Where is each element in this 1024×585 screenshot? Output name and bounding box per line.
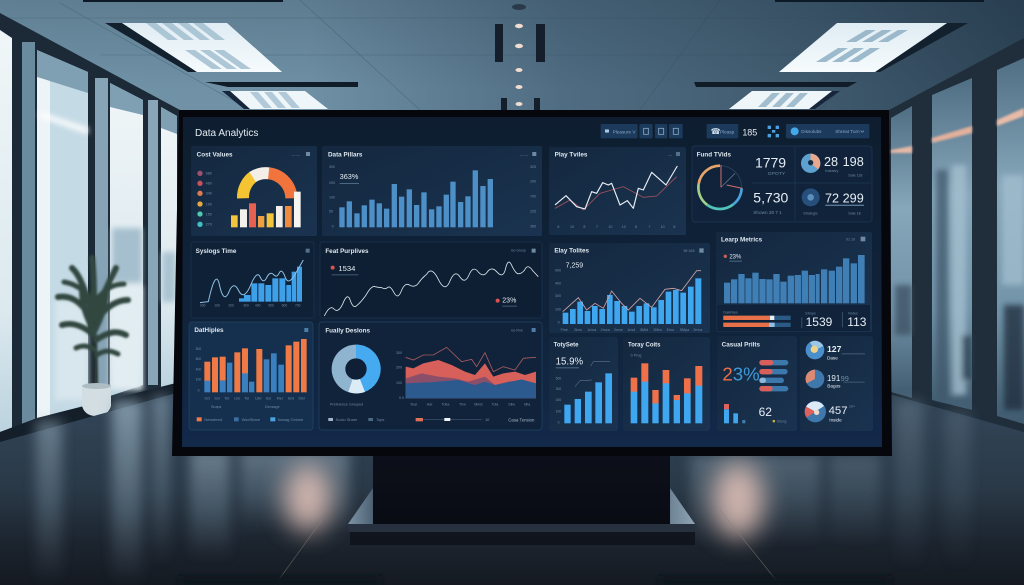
header toolbar: Shreat Turn — [835, 129, 860, 134]
panel: long analytics: Notes — [848, 312, 858, 316]
panel: play values line chart: Play Tviles — [555, 152, 588, 159]
panel: dat tables stacked bars: Stor — [298, 396, 306, 400]
panel: dat tables stacked bars: Densage — [265, 405, 280, 409]
monitor screen — [182, 117, 882, 447]
panel: data pillars bar chart: 200 — [329, 181, 335, 185]
panel: totals bar chart: 15.9% — [556, 356, 583, 367]
centre spotlights and vents — [495, 4, 545, 110]
panel: front values stats: Sale 18 — [848, 211, 861, 215]
panel: long analytics: Learp Metrics — [721, 236, 763, 243]
bars — [231, 192, 301, 227]
panel: fully designs donut and area chart: Tola — [492, 402, 499, 406]
panel: play values line chart: 8 — [583, 225, 585, 229]
small pie: 28 198 — [801, 154, 820, 173]
small dial: 72 299 — [802, 188, 820, 206]
panel: casual profiles — [717, 336, 797, 431]
legend dots: 980 — [206, 172, 212, 176]
panel: fully designs donut and area chart: Toka — [442, 402, 450, 406]
panel: today costs stacked bars: Toray Coits — [628, 343, 661, 349]
panel: data pillars bar chart: 700 — [530, 194, 536, 198]
panel: dat tables stacked bars: 500 — [196, 347, 201, 351]
white trend line — [555, 166, 677, 209]
panel: daily tables bar and line chart: 3Mid — [640, 328, 648, 332]
panel: daily tables bar and line chart: 900 — [555, 268, 561, 272]
progress bars — [723, 316, 791, 327]
pill bars — [759, 360, 788, 391]
panel: data pillars bar chart: — — — [520, 153, 529, 157]
panel: totals bar chart — [549, 337, 618, 431]
panel: today costs stacked bars — [623, 337, 710, 431]
panel: play values line chart: 8 — [557, 225, 559, 229]
panel: system time combo chart — [191, 242, 314, 318]
panel: fully designs donut and area chart: Mla — [524, 402, 531, 406]
panel: front values stats: Strategic — [803, 211, 818, 215]
trend line — [200, 260, 303, 303]
pie 3 — [805, 401, 826, 422]
orange bars — [204, 339, 307, 392]
panel: dat tables stacked bars: Mel — [277, 396, 283, 400]
panel: daily tables bar and line chart: 1mva — [587, 328, 597, 332]
panel: fully designs donut and area chart: 300 — [396, 351, 402, 355]
bars — [563, 278, 701, 324]
header toolbar: 185 — [742, 127, 757, 137]
data line — [324, 262, 538, 316]
panel: fully designs donut and area chart: Minis — [474, 402, 483, 406]
panel: play values line chart: 8 — [673, 225, 675, 229]
panel: front values stats — [692, 146, 872, 222]
legend: Newsfeed — [204, 417, 222, 422]
panel: system time combo chart: 400 — [255, 304, 261, 308]
panel: feat purposes line chart: 23% — [502, 298, 516, 305]
panel: play values line chart: 7 — [648, 225, 650, 229]
panel: casual profiles: Casual Prilts — [722, 342, 760, 349]
panel: system time combo chart: 300 — [243, 304, 249, 308]
legend: WaxShare — [242, 417, 261, 422]
panel: daily tables bar and line chart: 100 — [555, 307, 561, 311]
panel: totals bar chart: 100 — [556, 409, 561, 413]
panel: system time combo chart: 200 — [228, 304, 234, 308]
panel: daily tables bar and line chart: 98 168 — [683, 249, 695, 253]
panel: system time combo chart: 500 — [268, 304, 274, 308]
panel: data pillars bar chart — [322, 146, 542, 236]
panel: cost values donut and bars: Cost Values — [197, 152, 233, 159]
monitor stand — [348, 453, 695, 545]
legend: Nanag Oxtone — [278, 417, 304, 422]
panel: dat tables stacked bars: 0 — [198, 389, 200, 393]
small bars — [724, 404, 745, 423]
panel: long analytics: 01 10 — [846, 238, 855, 242]
legend dots: 460 — [206, 182, 212, 186]
panel: system time combo chart: Syslogs Time — [196, 248, 237, 255]
legend dots: 270 — [206, 223, 212, 227]
pie 1 — [806, 341, 824, 359]
panel: long analytics: Dakimsa — [723, 310, 739, 314]
legend: Casa Tension — [508, 417, 535, 422]
panel: front values stats: Fund TVids — [697, 152, 731, 159]
panel: pie summary: 99 — [841, 374, 849, 383]
panel: dat tables stacked bars — [189, 322, 313, 430]
panel: data pillars bar chart: 0 — [332, 224, 334, 228]
panel: data pillars bar chart: 300 — [329, 165, 335, 169]
panel: fully designs donut and area chart: Go Fine — [511, 328, 523, 332]
panel: long analytics: Shops — [805, 312, 816, 316]
semi-donut arc — [243, 173, 291, 198]
panel: long analytics: 113 — [847, 315, 867, 329]
legend: Socio Share — [336, 417, 358, 422]
panel: pie summary: 457 — [829, 405, 848, 417]
panel: daily tables bar and line chart: 2mva — [601, 328, 611, 332]
panel: play values line chart — [549, 147, 686, 235]
panel: pie summary: 10+ — [849, 404, 855, 408]
panel: fully designs donut and area chart: Preference Grouped — [330, 402, 363, 406]
panel: long analytics: 1539 — [806, 315, 833, 329]
panel: dat tables stacked bars: Lilo — [234, 396, 240, 400]
panel: front values stats: Sale 118 — [848, 174, 862, 178]
legend — [197, 417, 304, 422]
panel: front values stats: 198 — [843, 155, 864, 169]
panel: pie summary: Dase — [827, 355, 838, 360]
header title: Data Analytics — [195, 128, 258, 139]
panel: dat tables stacked bars: 100 — [196, 378, 201, 382]
panel: play values line chart: 10 — [622, 225, 626, 229]
panel: totals bar chart: 0 — [558, 420, 560, 424]
panel: system time combo chart: 600 — [282, 304, 287, 308]
panel: front values stats: 299 — [843, 192, 864, 206]
panel: daily tables bar and line chart: 2Mov — [653, 328, 662, 332]
right window wall — [889, 38, 1024, 432]
panel: front values stats: GPOTY — [768, 171, 786, 177]
trend line — [563, 271, 701, 312]
panel: fully designs donut and area chart: Thw — [459, 402, 466, 406]
panel: play values line chart: 8 — [635, 225, 637, 229]
panel: play values line chart: 10 — [661, 225, 665, 229]
red trend line — [555, 177, 677, 210]
panel: feat purposes line chart: 1534 — [338, 264, 356, 273]
panel: system time combo chart: 000 — [200, 304, 206, 308]
panel: pie summary: Bagos — [827, 383, 841, 388]
panel: daily tables bar and line chart — [549, 243, 710, 333]
panel: system time combo chart: 700 — [295, 304, 301, 308]
panel: fully designs donut and area chart: 200 — [396, 366, 402, 370]
panel: data pillars bar chart: 100 — [329, 195, 335, 199]
pie 2 — [806, 370, 824, 388]
panel: totals bar chart: 500 — [556, 376, 561, 380]
panel: dat tables stacked bars: Sol — [266, 396, 271, 400]
panel: cost values donut and bars — [191, 146, 317, 236]
panel: play values line chart: — — [668, 153, 672, 157]
donut — [332, 345, 381, 393]
panel: play values line chart: 7 — [596, 225, 598, 229]
panel: dat tables stacked bars: Tot — [224, 396, 229, 400]
panel: data pillars bar chart: 350 — [530, 224, 536, 228]
ceiling light: rear right — [694, 82, 857, 109]
panel: daily tables bar and line chart: Elay Tolites — [554, 248, 590, 255]
panel: front values stats: 1779 — [755, 154, 786, 170]
legend dots: 190 — [206, 202, 212, 206]
header toolbar — [601, 124, 869, 138]
panel: dat tables stacked bars: DatHiples — [194, 327, 224, 334]
area bars — [724, 255, 865, 303]
potted plant — [58, 258, 128, 416]
legend: 10 — [485, 417, 490, 422]
ceiling light: rear left — [205, 82, 358, 109]
panel: casual profiles: 23% — [722, 364, 760, 385]
panel: daily tables bar and line chart: 7,259 — [566, 263, 583, 270]
panel: pie summary: 127 — [827, 344, 842, 354]
panel: data pillars bar chart: 50 — [329, 210, 333, 214]
panel: fully designs donut and area chart: Fually Deslons — [325, 327, 370, 334]
header toolbar: Dissolubs — [801, 129, 822, 134]
panel: daily tables bar and line chart: 0 — [558, 321, 560, 325]
panel: daily tables bar and line chart: 400 — [555, 281, 561, 285]
panel: data pillars bar chart: 200 — [530, 180, 536, 184]
panel: totals bar chart: TotySete — [554, 343, 579, 349]
panel: totals bar chart: 200 — [556, 398, 561, 402]
legend dots: 150 — [206, 212, 212, 216]
panel: data pillars bar chart: 225 — [530, 210, 536, 214]
panel: fully designs donut and area chart — [319, 322, 542, 430]
panel: casual profiles: Strong — [777, 419, 787, 423]
header toolbar: ☎ — [711, 127, 721, 136]
panel: cost values donut and bars: — — — [292, 153, 300, 157]
panel: front values stats: 72 — [825, 192, 839, 206]
panel: dat tables stacked bars: Usb — [255, 396, 262, 400]
panel: daily tables bar and line chart: 2mve — [614, 328, 623, 332]
blue bars — [204, 353, 284, 392]
panel: daily tables bar and line chart: 2kva — [574, 328, 583, 332]
left window wall — [0, 13, 180, 442]
panel: daily tables bar and line chart: Fine — [561, 328, 568, 332]
panel: casual profiles: 62 — [759, 405, 772, 419]
panel: long analytics: 23% — [729, 254, 742, 260]
panel: dat tables stacked bars: Sol — [214, 396, 220, 400]
panel: feat purposes line chart: Go Group — [511, 249, 526, 253]
panel: data pillars bar chart: Data Pillars — [328, 152, 363, 159]
panel: daily tables bar and line chart: 5Mpa — [680, 328, 690, 332]
panel: system time combo chart: 100 — [214, 304, 220, 308]
header toolbar: Pleasp — [720, 129, 735, 134]
panel: pie summary: Inside — [829, 417, 842, 422]
legend — [328, 417, 535, 422]
ceiling light: front left — [105, 23, 282, 72]
panel: fully designs donut and area chart: Hat — [427, 402, 432, 406]
reflective floor — [0, 392, 1024, 585]
panel: data pillars bar chart: 363% — [340, 172, 359, 181]
panel: long analytics — [716, 232, 872, 332]
panel: fully designs donut and area chart: Sliw — [508, 402, 515, 406]
panel: today costs stacked bars: 0 Prog — [631, 354, 641, 358]
stacked area chart — [406, 347, 536, 398]
panel: daily tables bar and line chart: 300 — [555, 294, 561, 298]
panel: dat tables stacked bars: 800 — [196, 357, 201, 361]
monitor bezel — [172, 110, 892, 456]
bars — [339, 170, 493, 227]
panel: dat tables stacked bars: Snaps — [211, 405, 222, 409]
gauge dial — [698, 165, 742, 209]
panel: daily tables bar and line chart: 1mol — [627, 328, 635, 332]
panel: front values stats: Shown 28 7 1 — [753, 210, 782, 215]
panel: feat purposes line chart: Feat Purplives — [325, 248, 369, 255]
panel: daily tables bar and line chart: Emo — [667, 328, 674, 332]
panel: front values stats: Industry — [825, 169, 838, 173]
panel: feat purposes line chart — [320, 242, 542, 318]
panel: dat tables stacked bars: Oct — [204, 396, 210, 400]
ceiling light: front right — [779, 23, 968, 72]
panel: play values line chart: 10 — [608, 225, 612, 229]
panel: pie summary: 191 — [827, 374, 841, 383]
panel: play values line chart: 10 — [570, 225, 574, 229]
panel: dat tables stacked bars: Tol — [244, 396, 249, 400]
panel: daily tables bar and line chart: 2mva — [693, 328, 703, 332]
panel: front values stats: 28 — [824, 155, 838, 169]
legend dots — [197, 171, 212, 227]
legend: Tops — [376, 417, 384, 422]
ceiling — [0, 0, 1024, 200]
panel: pie summary — [800, 336, 873, 431]
panel: data pillars bar chart: 325 — [530, 165, 536, 169]
panel: fully designs donut and area chart: 0.0 — [399, 396, 404, 400]
panel: dat tables stacked bars: Snd — [288, 396, 294, 400]
panel: fully designs donut and area chart: Tear — [410, 402, 418, 406]
legend dots: 340 — [206, 192, 212, 196]
panel: fully designs donut and area chart: 100 — [396, 381, 402, 385]
panel: front values stats: 5,730 — [753, 190, 789, 206]
panel: totals bar chart: 300 — [556, 387, 561, 391]
panel: dat tables stacked bars: 400 — [196, 368, 201, 372]
header toolbar: Pleasure V — [613, 129, 636, 134]
monitor — [172, 110, 892, 456]
